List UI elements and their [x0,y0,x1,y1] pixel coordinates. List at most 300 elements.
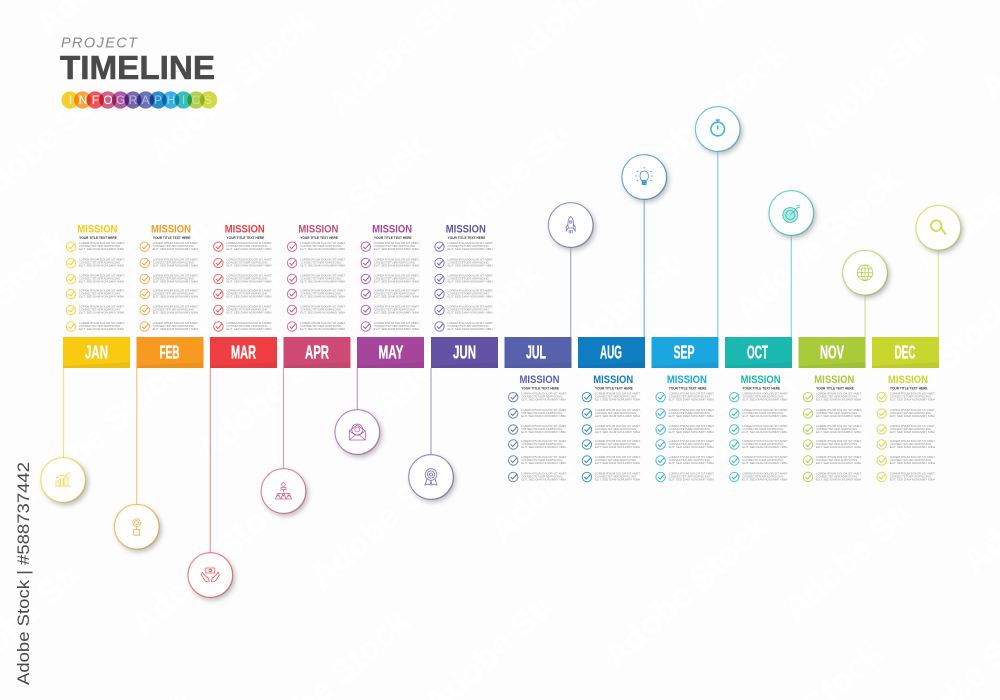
checklist: CONSECTETUER ADIPISCING [79,291,121,295]
month bar: NOV [798,337,866,368]
checklist: ELIT, SED DIAM NONUMMY NIBH [226,264,271,268]
checklist: CONSECTETUER ADIPISCING [448,291,490,295]
checklist: LOREM IPSUM DOLOR SIT AMET, [300,273,346,277]
checklist: CONSECTETUER ADIPISCING [153,324,195,328]
checklist: ELIT, SED DIAM NONUMMY NIBH [890,445,935,449]
subheading: YOUR TITLE TEXT HERE [595,387,633,391]
checklist: LOREM IPSUM DOLOR SIT AMET, [890,455,936,459]
milestone: April team hierarchy [261,368,308,516]
month bar: OCT [725,337,792,368]
checklist: CONSECTETUER ADIPISCING [79,324,121,328]
checklist: LOREM IPSUM DOLOR SIT AMET, [816,471,862,475]
checklist: LOREM IPSUM DOLOR SIT AMET, [669,391,715,395]
checklist: LOREM IPSUM DOLOR SIT AMET, [890,424,936,428]
title: infographics colored circles: G [116,93,125,107]
checklist: CONSECTETUER ADIPISCING [816,427,858,431]
checklist [361,241,420,331]
checklist: CONSECTETUER ADIPISCING [448,324,490,328]
heading: MISSION [814,374,854,386]
checklist: LOREM IPSUM DOLOR SIT AMET, [595,424,641,428]
title: infographics colored circles [61,91,217,109]
checklist [287,241,346,331]
month bar: MAY: MAY [378,341,404,362]
checklist: LOREM IPSUM DOLOR SIT AMET, [595,391,641,395]
checklist: LOREM IPSUM DOLOR SIT AMET, [374,304,420,308]
checklist: ELIT, SED DIAM NONUMMY NIBH [595,461,640,465]
checklist: ELIT, SED DIAM NONUMMY NIBH [374,310,419,314]
checklist: LOREM IPSUM DOLOR SIT AMET, [890,439,936,443]
checklist: LOREM IPSUM DOLOR SIT AMET, [816,424,862,428]
checklist: CONSECTETUER ADIPISCING [448,260,490,264]
subheading: YOUR TITLE TEXT HERE [448,236,485,240]
checklist: CONSECTETUER ADIPISCING [226,291,268,295]
checklist: CONSECTETUER ADIPISCING [669,411,711,415]
title: infographics colored circles: A [141,93,150,107]
month bar: MAR: MAR [231,341,256,362]
checklist: ELIT, SED DIAM NONUMMY NIBH [300,310,345,314]
title: infographics colored circles: S [204,93,212,107]
checklist: CONSECTETUER ADIPISCING [153,291,195,295]
checklist: CONSECTETUER ADIPISCING [226,260,268,264]
checklist: CONSECTETUER ADIPISCING [300,324,342,328]
checklist: CONSECTETUER ADIPISCING [890,442,932,446]
title block [60,36,217,109]
subheading: YOUR TITLE TEXT HERE [374,236,412,240]
checklist: ELIT, SED DIAM NONUMMY NIBH [153,294,198,298]
icon: magnifier [931,220,946,235]
checklist: CONSECTETUER ADIPISCING [742,458,784,462]
title: infographics colored circles: H [167,93,175,107]
milestone: December magnifier [916,205,963,337]
checklist: LOREM IPSUM DOLOR SIT AMET, [300,241,346,245]
checklist: LOREM IPSUM DOLOR SIT AMET, [816,408,862,412]
checklist: LOREM IPSUM DOLOR SIT AMET, [816,439,862,443]
checklist: CONSECTETUER ADIPISCING [300,244,342,248]
checklist: CONSECTETUER ADIPISCING [595,474,637,478]
checklist: LOREM IPSUM DOLOR SIT AMET, [79,288,125,292]
checklist: LOREM IPSUM DOLOR SIT AMET, [226,321,272,325]
checklist: CONSECTETUER ADIPISCING [374,276,416,280]
checklist: LOREM IPSUM DOLOR SIT AMET, [742,439,788,443]
checklist: LOREM IPSUM DOLOR SIT AMET, [374,321,420,325]
subheading: YOUR TITLE TEXT HERE [227,236,264,240]
checklist: CONSECTETUER ADIPISCING [816,474,858,478]
month bar: DEC [872,337,939,368]
checklist: LOREM IPSUM DOLOR SIT AMET, [742,408,788,412]
checklist: CONSECTETUER ADIPISCING [79,244,121,248]
month bar: JUN [431,337,498,368]
checklist: CONSECTETUER ADIPISCING [226,324,268,328]
milestone: September stopwatch [695,107,743,337]
subheading: YOUR TITLE TEXT HERE [742,387,780,391]
checklist: CONSECTETUER ADIPISCING [374,307,416,311]
checklist [66,241,125,331]
title: infographics colored circles: I [69,93,72,107]
checklist: ELIT, SED DIAM NONUMMY NIBH [521,430,566,434]
checklist: LOREM IPSUM DOLOR SIT AMET, [669,455,715,459]
checklist: CONSECTETUER ADIPISCING [300,307,342,311]
checklist: LOREM IPSUM DOLOR SIT AMET, [153,273,199,277]
month bar: SEP: SEP [674,341,694,362]
checklist: ELIT, SED DIAM NONUMMY NIBH [890,478,935,482]
icon: hands with money [201,568,219,582]
checklist: CONSECTETUER ADIPISCING [595,458,637,462]
subheading: YOUR TITLE TEXT HERE [521,387,559,391]
checklist: ELIT, SED DIAM NONUMMY NIBH [226,247,271,251]
checklist: CONSECTETUER ADIPISCING [595,411,637,415]
checklist: ELIT, SED DIAM NONUMMY NIBH [79,264,124,268]
subheading: YOUR TITLE TEXT HERE [890,387,928,391]
checklist: ELIT, SED DIAM NONUMMY NIBH [890,398,935,402]
checklist: CONSECTETUER ADIPISCING [669,458,711,462]
checklist: LOREM IPSUM DOLOR SIT AMET, [890,471,936,475]
checklist: CONSECTETUER ADIPISCING [153,260,195,264]
checklist: ELIT, SED DIAM NONUMMY NIBH [300,294,345,298]
milestone: January bar chart [41,368,88,506]
checklist: LOREM IPSUM DOLOR SIT AMET, [521,424,567,428]
checklist: CONSECTETUER ADIPISCING [374,291,416,295]
panel: june mission [435,223,493,331]
checklist: ELIT, SED DIAM NONUMMY NIBH [79,310,124,314]
checklist: CONSECTETUER ADIPISCING [79,260,121,264]
icon: target with arrow [783,205,800,222]
checklist: CONSECTETUER ADIPISCING [79,276,121,280]
checklist: ELIT, SED DIAM NONUMMY NIBH [300,327,345,331]
checklist: LOREM IPSUM DOLOR SIT AMET, [448,241,493,245]
title: project: PROJECT [61,36,138,52]
checklist: ELIT, SED DIAM NONUMMY NIBH [300,280,345,284]
panel: november mission [803,374,862,482]
panel: april mission [287,223,346,331]
checklist: ELIT, SED DIAM NONUMMY NIBH [890,461,935,465]
checklist: ELIT, SED DIAM NONUMMY NIBH [226,327,271,331]
checklist: LOREM IPSUM DOLOR SIT AMET, [595,455,641,459]
checklist: LOREM IPSUM DOLOR SIT AMET, [448,288,493,292]
checklist: LOREM IPSUM DOLOR SIT AMET, [595,408,641,412]
checklist: CONSECTETUER ADIPISCING [742,442,784,446]
icon: team hierarchy [276,483,292,499]
checklist: ELIT, SED DIAM NONUMMY NIBH [300,247,345,251]
title: infographics colored circles: O [103,93,113,107]
month bar: APR: APR [305,341,329,362]
checklist: CONSECTETUER ADIPISCING [890,411,932,415]
month bar: MAY [357,337,424,368]
checklist [730,392,788,482]
checklist: ELIT, SED DIAM NONUMMY NIBH [742,445,787,449]
checklist: LOREM IPSUM DOLOR SIT AMET, [300,304,346,308]
checklist: ELIT, SED DIAM NONUMMY NIBH [890,430,935,434]
checklist: LOREM IPSUM DOLOR SIT AMET, [669,471,715,475]
checklist: LOREM IPSUM DOLOR SIT AMET, [153,241,199,245]
milestone: May envelope with gear [335,368,382,458]
milestone: March hands with money [188,368,235,600]
checklist: CONSECTETUER ADIPISCING [816,411,858,415]
checklist: ELIT, SED DIAM NONUMMY NIBH [890,414,935,418]
checklist: ELIT, SED DIAM NONUMMY NIBH [816,414,861,418]
checklist: ELIT, SED DIAM NONUMMY NIBH [448,327,493,331]
heading: MISSION [741,374,781,386]
checklist: CONSECTETUER ADIPISCING [890,395,932,399]
checklist: ELIT, SED DIAM NONUMMY NIBH [374,264,419,268]
checklist: ELIT, SED DIAM NONUMMY NIBH [742,478,787,482]
checklist: ELIT, SED DIAM NONUMMY NIBH [742,430,787,434]
checklist: LOREM IPSUM DOLOR SIT AMET, [374,273,420,277]
heading: MISSION [520,374,560,386]
checklist: CONSECTETUER ADIPISCING [521,458,563,462]
title: infographics colored circles: P [154,93,162,107]
checklist: LOREM IPSUM DOLOR SIT AMET, [153,321,199,325]
checklist: LOREM IPSUM DOLOR SIT AMET, [374,257,420,261]
checklist: LOREM IPSUM DOLOR SIT AMET, [816,391,862,395]
month bar: OCT: OCT [747,341,768,362]
checklist: LOREM IPSUM DOLOR SIT AMET, [374,241,420,245]
checklist: CONSECTETUER ADIPISCING [742,411,784,415]
checklist: LOREM IPSUM DOLOR SIT AMET, [521,408,567,412]
checklist: ELIT, SED DIAM NONUMMY NIBH [669,414,714,418]
checklist [656,392,715,482]
title: infographics colored circles: R [129,93,138,107]
checklist: CONSECTETUER ADIPISCING [890,427,932,431]
checklist [582,392,641,482]
panel: july mission [508,374,567,482]
panel: january mission [66,223,125,331]
icon: award ribbon [425,469,437,485]
checklist: ELIT, SED DIAM NONUMMY NIBH [816,478,861,482]
checklist: LOREM IPSUM DOLOR SIT AMET, [742,424,788,428]
checklist: ELIT, SED DIAM NONUMMY NIBH [595,478,640,482]
checklist: LOREM IPSUM DOLOR SIT AMET, [374,288,420,292]
checklist: LOREM IPSUM DOLOR SIT AMET, [595,471,641,475]
checklist: CONSECTETUER ADIPISCING [521,395,563,399]
checklist: LOREM IPSUM DOLOR SIT AMET, [521,439,567,443]
month bar: APR [284,337,350,368]
checklist: LOREM IPSUM DOLOR SIT AMET, [890,408,936,412]
heading: MISSION [372,223,412,235]
checklist: LOREM IPSUM DOLOR SIT AMET, [448,304,493,308]
checklist: CONSECTETUER ADIPISCING [521,442,563,446]
checklist: CONSECTETUER ADIPISCING [79,307,121,311]
checklist: LOREM IPSUM DOLOR SIT AMET, [226,257,272,261]
subheading: YOUR TITLE TEXT HERE [669,387,706,391]
checklist: LOREM IPSUM DOLOR SIT AMET, [669,408,715,412]
title: infographics colored circles: F [92,93,99,107]
checklist: CONSECTETUER ADIPISCING [374,324,416,328]
checklist: ELIT, SED DIAM NONUMMY NIBH [816,461,861,465]
checklist: LOREM IPSUM DOLOR SIT AMET, [153,288,199,292]
milestone: June award ribbon [409,368,456,502]
checklist: CONSECTETUER ADIPISCING [890,474,932,478]
checklist: ELIT, SED DIAM NONUMMY NIBH [595,398,640,402]
checklist: LOREM IPSUM DOLOR SIT AMET, [669,424,715,428]
checklist: CONSECTETUER ADIPISCING [448,307,490,311]
month bar: JAN [63,337,130,368]
checklist: ELIT, SED DIAM NONUMMY NIBH [300,264,345,268]
checklist: LOREM IPSUM DOLOR SIT AMET, [153,304,199,308]
checklist: CONSECTETUER ADIPISCING [669,395,711,399]
milestone: October target [769,191,816,337]
checklist: CONSECTETUER ADIPISCING [669,442,711,446]
checklist: CONSECTETUER ADIPISCING [448,244,490,248]
checklist: LOREM IPSUM DOLOR SIT AMET, [521,391,567,395]
icon: rocket [566,216,575,234]
milestone: November globe [843,250,890,337]
checklist: CONSECTETUER ADIPISCING [226,307,268,311]
checklist: ELIT, SED DIAM NONUMMY NIBH [742,414,787,418]
checklist: LOREM IPSUM DOLOR SIT AMET, [742,471,788,475]
subheading: YOUR TITLE TEXT HERE [816,387,854,391]
month bar: JAN: JAN [85,341,108,362]
icon: envelope with gear [349,424,365,440]
milestone: August light bulb [622,155,669,337]
checklist: ELIT, SED DIAM NONUMMY NIBH [79,280,124,284]
checklist: CONSECTETUER ADIPISCING [300,260,342,264]
checklist: LOREM IPSUM DOLOR SIT AMET, [595,439,641,443]
checklist: CONSECTETUER ADIPISCING [521,411,563,415]
checklist: CONSECTETUER ADIPISCING [448,276,490,280]
icon: coin plant [133,519,140,535]
checklist: LOREM IPSUM DOLOR SIT AMET, [816,455,862,459]
checklist: CONSECTETUER ADIPISCING [669,427,711,431]
checklist: CONSECTETUER ADIPISCING [226,244,268,248]
checklist: LOREM IPSUM DOLOR SIT AMET, [448,273,493,277]
checklist: ELIT, SED DIAM NONUMMY NIBH [669,478,714,482]
month bar: AUG: AUG [600,341,622,362]
checklist: LOREM IPSUM DOLOR SIT AMET, [669,439,715,443]
checklist: LOREM IPSUM DOLOR SIT AMET, [79,321,125,325]
checklist: CONSECTETUER ADIPISCING [521,474,563,478]
checklist: LOREM IPSUM DOLOR SIT AMET, [79,304,125,308]
milestone: July rocket [548,203,596,337]
checklist [803,392,862,482]
checklist: ELIT, SED DIAM NONUMMY NIBH [79,294,124,298]
title: infographics colored circles: C [192,93,201,107]
checklist: ELIT, SED DIAM NONUMMY NIBH [595,414,640,418]
checklist: ELIT, SED DIAM NONUMMY NIBH [669,445,714,449]
checklist: ELIT, SED DIAM NONUMMY NIBH [374,280,419,284]
heading: MISSION [667,374,707,386]
month bar: SEP [652,337,718,368]
checklist: ELIT, SED DIAM NONUMMY NIBH [595,430,640,434]
checklist: CONSECTETUER ADIPISCING [890,458,932,462]
month bar: DEC: DEC [894,341,916,362]
panel: may mission [361,223,420,331]
checklist: ELIT, SED DIAM NONUMMY NIBH [79,247,124,251]
checklist [214,241,272,331]
checklist: LOREM IPSUM DOLOR SIT AMET, [153,257,199,261]
checklist: LOREM IPSUM DOLOR SIT AMET, [226,304,272,308]
checklist: CONSECTETUER ADIPISCING [374,260,416,264]
checklist: ELIT, SED DIAM NONUMMY NIBH [521,414,566,418]
icon: light bulb [635,167,653,184]
checklist: ELIT, SED DIAM NONUMMY NIBH [521,398,566,402]
checklist: ELIT, SED DIAM NONUMMY NIBH [226,294,271,298]
panel: december mission [877,374,936,482]
panel: august mission [582,374,641,482]
checklist: LOREM IPSUM DOLOR SIT AMET, [300,321,346,325]
checklist: ELIT, SED DIAM NONUMMY NIBH [374,327,419,331]
subheading: YOUR TITLE TEXT HERE [300,236,338,240]
checklist: LOREM IPSUM DOLOR SIT AMET, [79,241,125,245]
checklist: ELIT, SED DIAM NONUMMY NIBH [742,398,787,402]
panel: october mission [730,374,788,482]
checklist: ELIT, SED DIAM NONUMMY NIBH [448,280,493,284]
checklist: CONSECTETUER ADIPISCING [226,276,268,280]
checklist: ELIT, SED DIAM NONUMMY NIBH [521,478,566,482]
title: infographics colored circles: I [182,93,185,107]
checklist: ELIT, SED DIAM NONUMMY NIBH [816,430,861,434]
checklist: CONSECTETUER ADIPISCING [669,474,711,478]
checklist: CONSECTETUER ADIPISCING [742,474,784,478]
month bar: FEB [136,337,204,368]
checklist: ELIT, SED DIAM NONUMMY NIBH [448,310,493,314]
checklist: LOREM IPSUM DOLOR SIT AMET, [742,391,788,395]
checklist: ELIT, SED DIAM NONUMMY NIBH [742,461,787,465]
checklist: ELIT, SED DIAM NONUMMY NIBH [153,280,198,284]
checklist: CONSECTETUER ADIPISCING [742,395,784,399]
checklist [508,392,567,482]
month bar: JUL: JUL [526,341,546,362]
month bar: FEB: FEB [160,341,180,362]
checklist: ELIT, SED DIAM NONUMMY NIBH [374,247,419,251]
checklist: LOREM IPSUM DOLOR SIT AMET, [300,257,346,261]
checklist: LOREM IPSUM DOLOR SIT AMET, [521,471,567,475]
checklist: LOREM IPSUM DOLOR SIT AMET, [448,321,493,325]
checklist: ELIT, SED DIAM NONUMMY NIBH [153,247,198,251]
checklist: CONSECTETUER ADIPISCING [153,276,195,280]
checklist: LOREM IPSUM DOLOR SIT AMET, [226,241,272,245]
checklist: ELIT, SED DIAM NONUMMY NIBH [816,398,861,402]
title: infographics colored circles: N [79,93,87,107]
subheading: YOUR TITLE TEXT HERE [79,236,117,240]
checklist: CONSECTETUER ADIPISCING [595,442,637,446]
checklist: ELIT, SED DIAM NONUMMY NIBH [448,294,493,298]
month bar: NOV: NOV [820,341,844,362]
heading: MISSION [593,374,633,386]
side credit text: Adobe Stock | #588737442 [14,462,33,685]
panel: march mission [214,223,272,331]
checklist: CONSECTETUER ADIPISCING [595,427,637,431]
subheading: YOUR TITLE TEXT HERE [153,236,191,240]
checklist: CONSECTETUER ADIPISCING [153,307,195,311]
checklist: ELIT, SED DIAM NONUMMY NIBH [521,461,566,465]
heading: MISSION [298,223,338,235]
month bar: AUG [578,337,645,368]
checklist: ELIT, SED DIAM NONUMMY NIBH [669,430,714,434]
checklist: CONSECTETUER ADIPISCING [300,276,342,280]
checklist: CONSECTETUER ADIPISCING [153,244,195,248]
checklist: ELIT, SED DIAM NONUMMY NIBH [448,247,493,251]
icon: globe [857,265,873,280]
checklist: ELIT, SED DIAM NONUMMY NIBH [153,327,198,331]
checklist: CONSECTETUER ADIPISCING [742,427,784,431]
checklist: ELIT, SED DIAM NONUMMY NIBH [79,327,124,331]
month bar: MAR [210,337,277,368]
checklist [435,241,493,331]
checklist: LOREM IPSUM DOLOR SIT AMET, [300,288,346,292]
checklist: CONSECTETUER ADIPISCING [595,395,637,399]
checklist: LOREM IPSUM DOLOR SIT AMET, [890,391,936,395]
heading: MISSION [888,374,928,386]
checklist: LOREM IPSUM DOLOR SIT AMET, [79,273,125,277]
checklist: LOREM IPSUM DOLOR SIT AMET, [79,257,125,261]
checklist: ELIT, SED DIAM NONUMMY NIBH [374,294,419,298]
heading: MISSION [446,223,486,235]
checklist: CONSECTETUER ADIPISCING [816,458,858,462]
checklist: LOREM IPSUM DOLOR SIT AMET, [226,273,272,277]
month bar: JUN: JUN [453,341,476,362]
month bar: JUL [504,337,572,368]
checklist: ELIT, SED DIAM NONUMMY NIBH [521,445,566,449]
